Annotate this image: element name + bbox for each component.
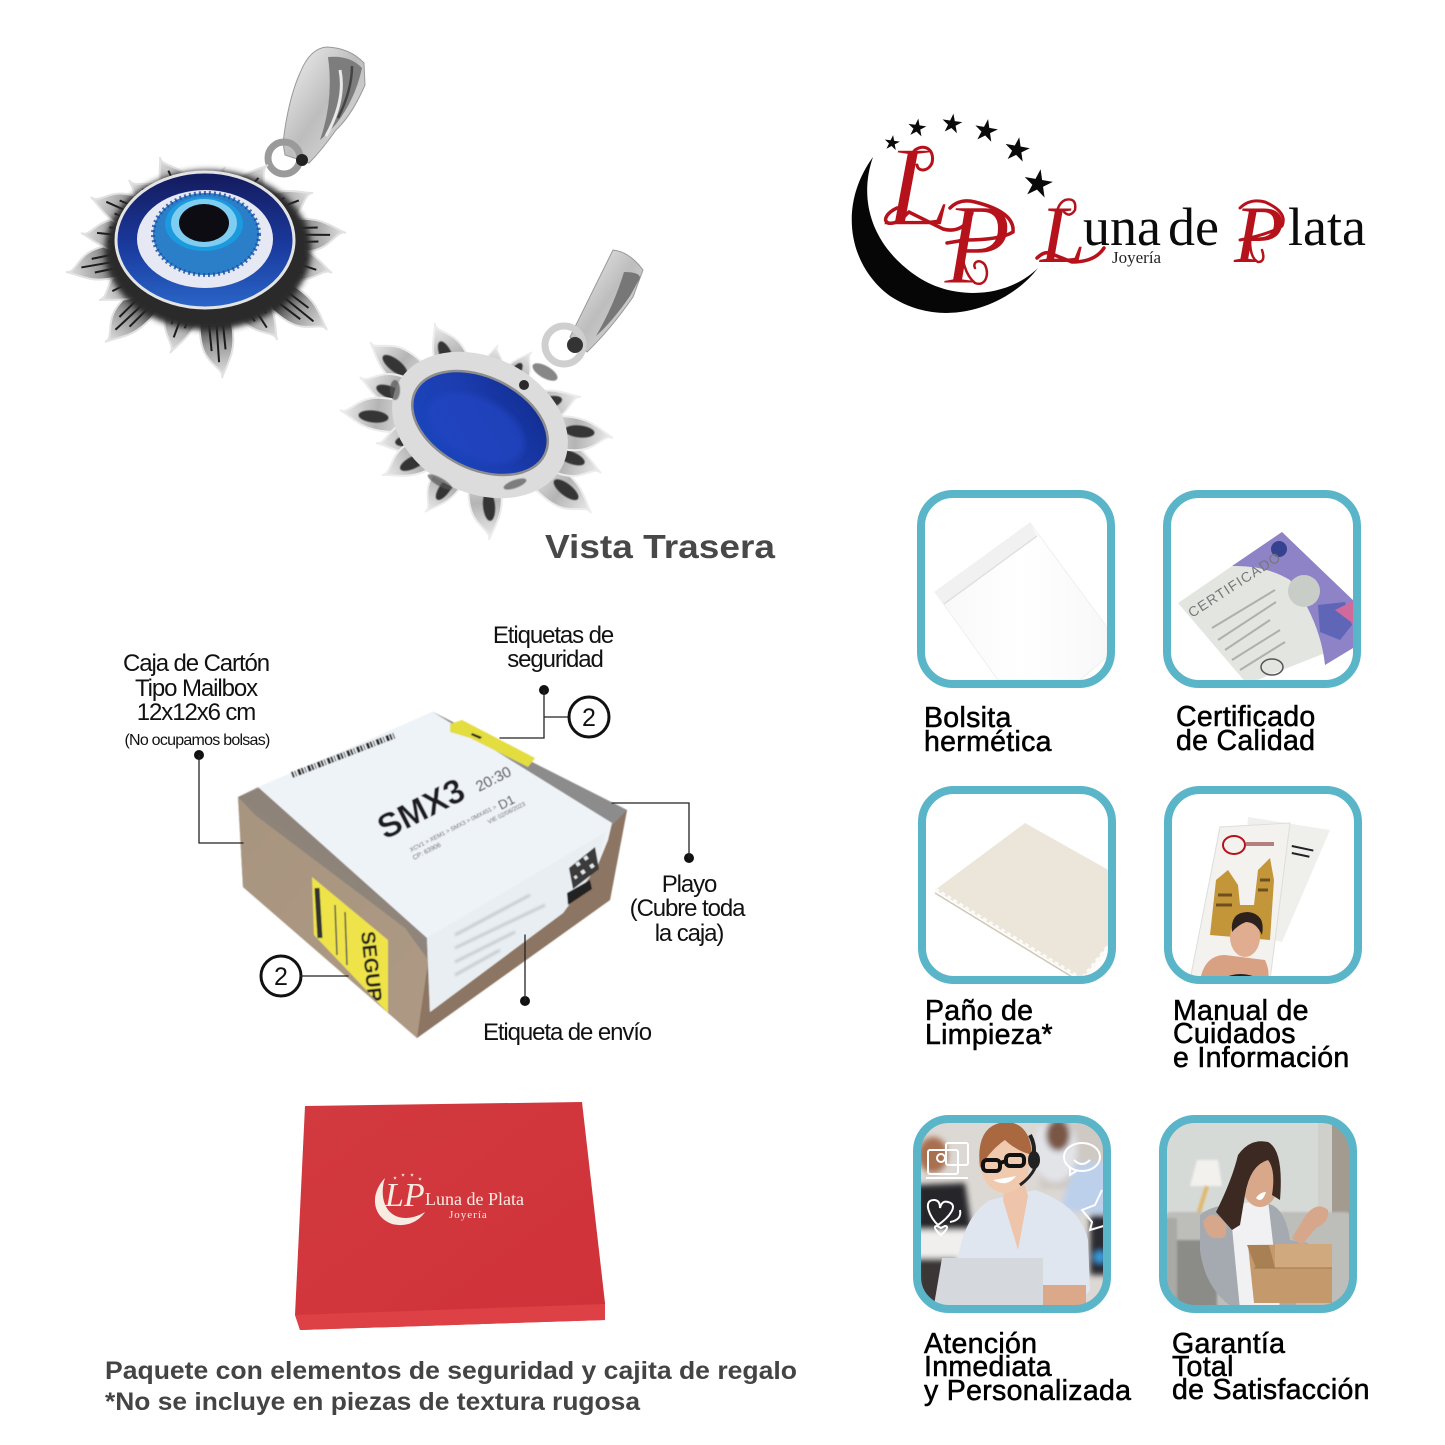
agent (958, 1190, 1090, 1295)
panel: customer support (917, 1118, 1131, 1407)
logo subtitle: Joyería (1112, 248, 1162, 267)
customer photo (1167, 1123, 1349, 1305)
manual frame (1168, 790, 1358, 980)
bag label: hermética (924, 726, 1052, 758)
caption: rear view: Vista Trasera (545, 528, 776, 565)
certificate image (1178, 532, 1358, 684)
box note: (No ocupamos bolsas) (124, 732, 270, 749)
callout: security seals top (493, 622, 614, 738)
cloth label: Limpieza* (925, 1019, 1053, 1051)
box description: Tipo Mailbox (135, 675, 258, 702)
yellow security seal side (312, 877, 388, 1013)
right side of box (417, 810, 627, 1038)
box body (238, 712, 627, 1038)
leader line (500, 685, 570, 738)
label destination: D1 (496, 792, 517, 813)
panel: cleaning cloth (922, 790, 1112, 1051)
count badge: 2 (582, 704, 596, 732)
support photo (921, 1123, 1103, 1305)
seal text (317, 888, 385, 1004)
callout: shipping label (483, 935, 652, 1046)
leader line (194, 750, 243, 843)
crescent moon (852, 157, 1038, 313)
leader line (520, 935, 530, 1006)
wordmark: P (1233, 189, 1284, 280)
box description: Caja de Cartón (123, 650, 269, 677)
bag image (935, 523, 1107, 680)
pendant bail (268, 47, 365, 174)
chat icons (926, 1143, 1107, 1235)
sun rays (62, 149, 347, 380)
wordmark: L (1039, 189, 1086, 280)
support label: Atención (924, 1328, 1037, 1360)
blurred address (455, 895, 545, 975)
wrap label: Playo (662, 871, 717, 898)
open cardboard box (1248, 1244, 1332, 1303)
eye ring and enamel (116, 172, 294, 308)
customer frame (1163, 1119, 1353, 1309)
manual label: Manual de (1173, 995, 1309, 1027)
label postal code: CP: 63906 (412, 841, 443, 862)
support frame (917, 1119, 1107, 1309)
box description: 12x12x6 cm (137, 699, 255, 726)
shipping box photo (238, 712, 627, 1038)
seals label: Etiquetas de (493, 622, 614, 649)
customer (1200, 1203, 1308, 1309)
barcode (292, 735, 396, 775)
pendant: front view with blue eye (62, 47, 365, 380)
panel: care manual (1168, 790, 1358, 1074)
back sun rays (338, 316, 615, 541)
support label: Inmediata (924, 1351, 1052, 1383)
support label: y Personalizada (924, 1375, 1131, 1407)
pendant: back view (338, 250, 643, 541)
manual label: Cuidados (1173, 1018, 1296, 1050)
wrap label: (Cubre toda (630, 895, 746, 922)
stars (884, 112, 1055, 198)
route text: XCV1 > XEM1 > SMX3 > 0MX451 > (409, 804, 498, 854)
callout: cardboard box (123, 650, 270, 843)
wrap label: la caja) (655, 920, 723, 947)
panel: sealed bag (921, 494, 1111, 758)
gift box logo: Joyería (449, 1209, 488, 1221)
back pendant bail (545, 250, 643, 364)
seal text: SEGUR (356, 930, 385, 1004)
manual image (1190, 817, 1330, 980)
callout: side seal count (261, 956, 348, 996)
monogram LP: L (883, 123, 952, 250)
monogram LP: P (943, 181, 1011, 309)
panel: certificate (1167, 494, 1358, 757)
cloth label: Paño de (925, 995, 1033, 1027)
wordmark: lata (1288, 197, 1366, 257)
wordmark: una (1083, 197, 1174, 257)
yellow security seal top (450, 720, 535, 767)
leader line (612, 803, 694, 863)
plastic wrap edge (433, 712, 627, 825)
leader line (301, 975, 348, 977)
gift box logo (375, 1173, 524, 1225)
guarantee label: Total (1172, 1351, 1234, 1383)
certificate label: de Calidad (1176, 725, 1315, 757)
left side of box (238, 797, 432, 1038)
cloth image (935, 823, 1112, 983)
label date: VIE 02/06/2023 (487, 801, 527, 826)
manual label: e Información (1173, 1042, 1350, 1074)
bag label: Bolsita (924, 702, 1012, 734)
bag frame (921, 494, 1111, 684)
footer note: Paquete con elementos de seguridad y cajita de regalo (105, 1357, 797, 1385)
callout: plastic wrap (612, 803, 746, 947)
panel: satisfaction guarantee (1163, 1119, 1370, 1406)
certificate frame (1167, 494, 1357, 684)
laptop (934, 1258, 1043, 1305)
footer note: *No se incluye en piezas de textura rugosa (105, 1388, 641, 1416)
shipping label (258, 712, 612, 1012)
guarantee label: de Satisfacción (1172, 1374, 1370, 1406)
cloth frame (922, 790, 1112, 980)
certificate image: CERTIFICADO (1185, 548, 1284, 621)
shipping label text: Etiqueta de envío (483, 1019, 652, 1046)
gift box logo: Luna de Plata (425, 1189, 524, 1209)
red gift box (295, 1102, 605, 1330)
brand logo (852, 112, 1366, 313)
label code: SMX3 (371, 771, 471, 847)
QR code (567, 847, 599, 905)
label time: 20:30 (473, 763, 514, 796)
count badge: 2 (274, 963, 288, 991)
wordmark: de (1168, 197, 1232, 257)
gift box logo: LP (384, 1177, 425, 1214)
certificate label: Certificado (1176, 701, 1316, 733)
blue oval stone (395, 350, 565, 496)
guarantee label: Garantía (1172, 1328, 1285, 1360)
monogram LP (883, 123, 1013, 309)
wordmark swashes (1037, 199, 1283, 262)
seals label: seguridad (507, 646, 603, 673)
